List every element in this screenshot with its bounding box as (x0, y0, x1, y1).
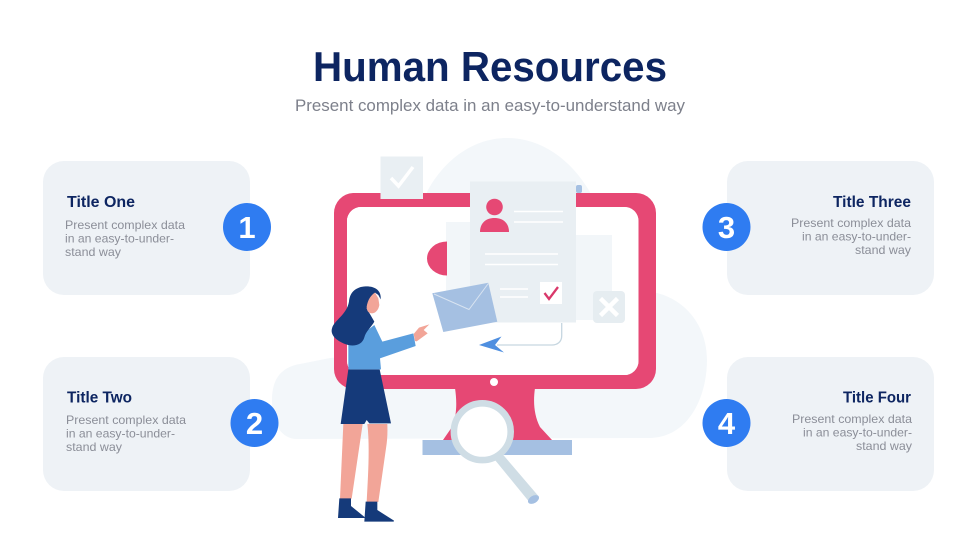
text block: title three (791, 216, 911, 257)
icon: envelope (432, 283, 497, 332)
monitor (334, 193, 656, 455)
text block: title two: in an easy-to-under- (66, 426, 175, 440)
text block: title four: Present complex data (792, 412, 912, 426)
number badge 3 (702, 203, 750, 251)
text block: title one (65, 218, 185, 259)
number badge 1 (223, 203, 271, 251)
arrow (479, 323, 562, 352)
text block: title three: stand way (855, 243, 911, 257)
number badge 3: 3 (718, 210, 735, 245)
panel: title one (43, 161, 250, 295)
heading: title two: Title Two (67, 390, 132, 406)
heading: title three: Title Three (833, 194, 911, 211)
number badge 2 (230, 399, 278, 447)
text block: title one: stand way (65, 245, 121, 259)
document: profile (470, 182, 576, 322)
icon: top check box (380, 156, 423, 199)
number badge 4: 4 (718, 406, 736, 441)
panel: title two (43, 357, 250, 491)
subtitle: Present complex data in an easy-to-understand way (295, 96, 685, 115)
back document and chart (427, 222, 612, 320)
text block: title two: stand way (66, 440, 122, 454)
icon: paper clip (576, 185, 582, 193)
panel: title four (727, 357, 934, 491)
number badge 2: 2 (246, 406, 263, 441)
text block: title three: Present complex data (791, 216, 911, 230)
text block: title four (792, 412, 912, 453)
number badge 1: 1 (238, 210, 256, 245)
icon: cross box (593, 291, 625, 323)
text block: title one: in an easy-to-under- (65, 232, 174, 246)
title: Human Resources (313, 43, 667, 90)
text block: title two: Present complex data (66, 413, 186, 427)
heading: title one: Title One (67, 194, 135, 211)
text block: title one: Present complex data (65, 218, 185, 232)
text block: title four: in an easy-to-under- (803, 426, 912, 440)
panel: title three (727, 161, 934, 295)
woman figure (332, 286, 429, 522)
magnifying glass (454, 403, 541, 506)
number badge 4 (702, 399, 750, 447)
text block: title three: in an easy-to-under- (802, 230, 911, 244)
background blob (272, 138, 707, 439)
text block: title two (66, 413, 186, 454)
text block: title four: stand way (856, 439, 912, 453)
heading: title four: Title Four (843, 390, 911, 406)
